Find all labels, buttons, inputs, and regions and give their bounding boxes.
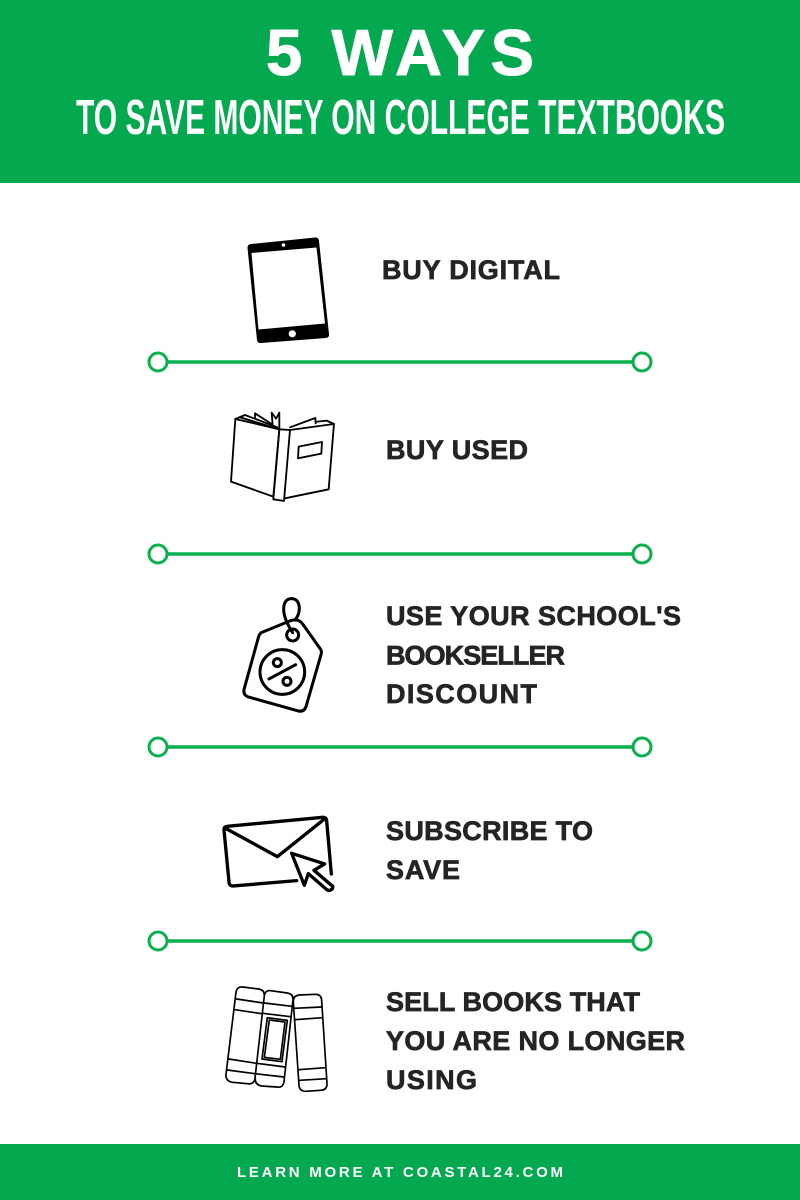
icon: row of books [226, 987, 327, 1091]
step 4 label: SUBSCRIBE TO [386, 816, 593, 846]
step 4 label: SAVE [386, 855, 460, 885]
icon: tablet [247, 237, 329, 343]
step 5 label: USING [386, 1065, 477, 1095]
footer banner [0, 1144, 800, 1200]
step 3 label: USE YOUR SCHOOL'S [386, 601, 681, 631]
header banner [0, 0, 800, 183]
step 3 label: DISCOUNT [386, 679, 538, 709]
step 5 label: YOU ARE NO LONGER [386, 1026, 685, 1056]
divider 2 [149, 545, 651, 563]
step 3 label [386, 601, 681, 709]
step 4 label [386, 816, 593, 885]
icon: envelope with cursor [224, 817, 333, 890]
divider 4 [149, 932, 651, 950]
divider 1 [149, 353, 651, 371]
footer text: LEARN MORE AT COASTAL24.COM [237, 1164, 563, 1181]
icon: discount tag [244, 599, 321, 711]
step 5 label: SELL BOOKS THAT [386, 987, 640, 1017]
step 2 label: BUY USED [386, 435, 528, 465]
title: 5 ways: 5 WAYS [266, 16, 534, 89]
step 1 label: BUY DIGITAL [382, 255, 560, 285]
icon: open book [231, 413, 334, 501]
step 5 label [386, 987, 685, 1095]
step 3 label: BOOKSELLER [386, 640, 565, 670]
divider 3 [149, 738, 651, 756]
